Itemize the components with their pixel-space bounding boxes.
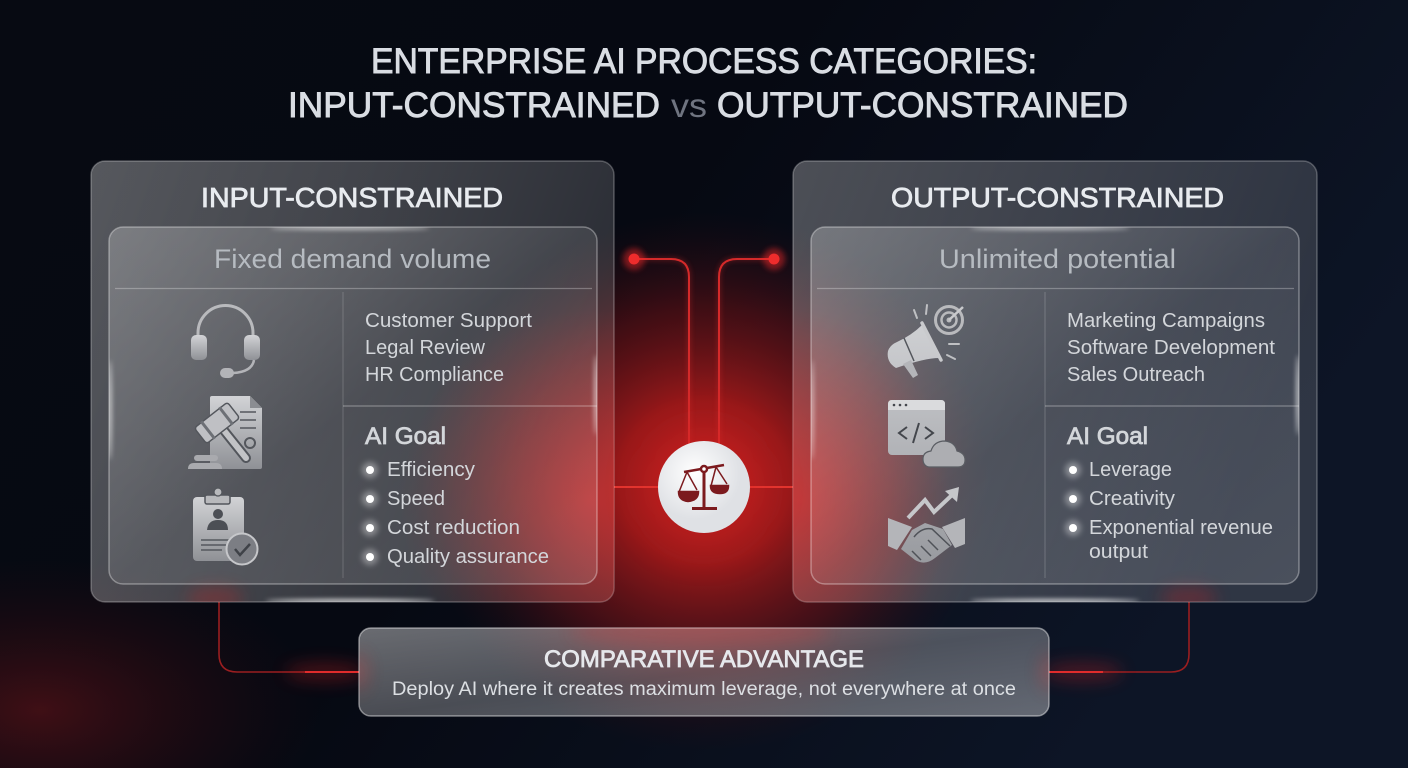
- heading: INPUT-CONSTRAINED: [201, 182, 503, 213]
- text block: AI goal: Creativity: [1089, 488, 1175, 510]
- arrow: left dot connector: [623, 248, 689, 445]
- text block: AI goal: Leverage: [1089, 459, 1172, 481]
- horizontal links from panels to badge: [614, 486, 793, 488]
- icon: code window with cloud: [888, 400, 965, 467]
- text block: AI goal: Exponential revenue: [1089, 517, 1273, 539]
- text block: AI goal: Efficiency: [387, 459, 475, 481]
- arrow: bottom left connector: [219, 602, 365, 682]
- subheading: Unlimited potential: [939, 244, 1176, 274]
- text block: AI goal: Quality assurance: [387, 546, 549, 568]
- centre badge: balance scale: [648, 431, 760, 543]
- text block: AI goal: output: [1089, 541, 1148, 563]
- arrow: right dot connector: [719, 248, 785, 445]
- title: INPUT-CONSTRAINED: [288, 86, 660, 125]
- text block: process list: Customer Support: [365, 310, 532, 332]
- connectors: top dots to centre badge: [219, 248, 1189, 682]
- text block: AI goal: AI Goal: [365, 423, 446, 450]
- icon: scales: [679, 465, 728, 508]
- subheading: Fixed demand volume: [214, 244, 491, 274]
- panel: output-constrained: [792, 160, 1318, 603]
- text block: AI goal: [1065, 423, 1273, 563]
- callout: comparative advantage: COMPARATIVE ADVANTAGE: [544, 646, 864, 673]
- title: ENTERPRISE AI PROCESS CATEGORIES:: [371, 42, 1037, 81]
- text block: process list: Legal Review: [365, 337, 486, 359]
- text block: process list: [365, 310, 532, 386]
- callout: comparative advantage: Deploy AI where it creates maximum leverage, not everywhere at once: [392, 679, 1016, 700]
- text block: AI goal: [362, 423, 549, 568]
- inner panel: [810, 226, 1300, 584]
- text block: process list: Software Development: [1067, 337, 1275, 359]
- icon: megaphone and target: [888, 305, 963, 378]
- title: [288, 42, 1128, 125]
- text block: AI goal: AI Goal: [1067, 423, 1148, 450]
- text block: process list: Sales Outreach: [1067, 364, 1205, 386]
- title: OUTPUT-CONSTRAINED: [717, 86, 1128, 125]
- text block: AI goal: Speed: [387, 488, 445, 510]
- icon: gavel on legal document: [188, 396, 262, 469]
- icon: clipboard with profile and check: [193, 488, 258, 564]
- text block: process list: HR Compliance: [365, 364, 504, 386]
- heading: OUTPUT-CONSTRAINED: [891, 182, 1224, 213]
- icon: headset: [191, 306, 260, 378]
- inner panel: [108, 226, 598, 584]
- text block: AI goal: Cost reduction: [387, 517, 520, 539]
- callout: comparative advantage: [358, 627, 1050, 717]
- arrow: bottom right connector: [1043, 602, 1189, 682]
- text block: process list: Marketing Campaigns: [1067, 310, 1265, 332]
- title: vs: [671, 87, 707, 124]
- text block: process list: [1067, 310, 1275, 386]
- panel: input-constrained: [90, 160, 615, 603]
- icon: handshake with growth arrow: [888, 487, 965, 563]
